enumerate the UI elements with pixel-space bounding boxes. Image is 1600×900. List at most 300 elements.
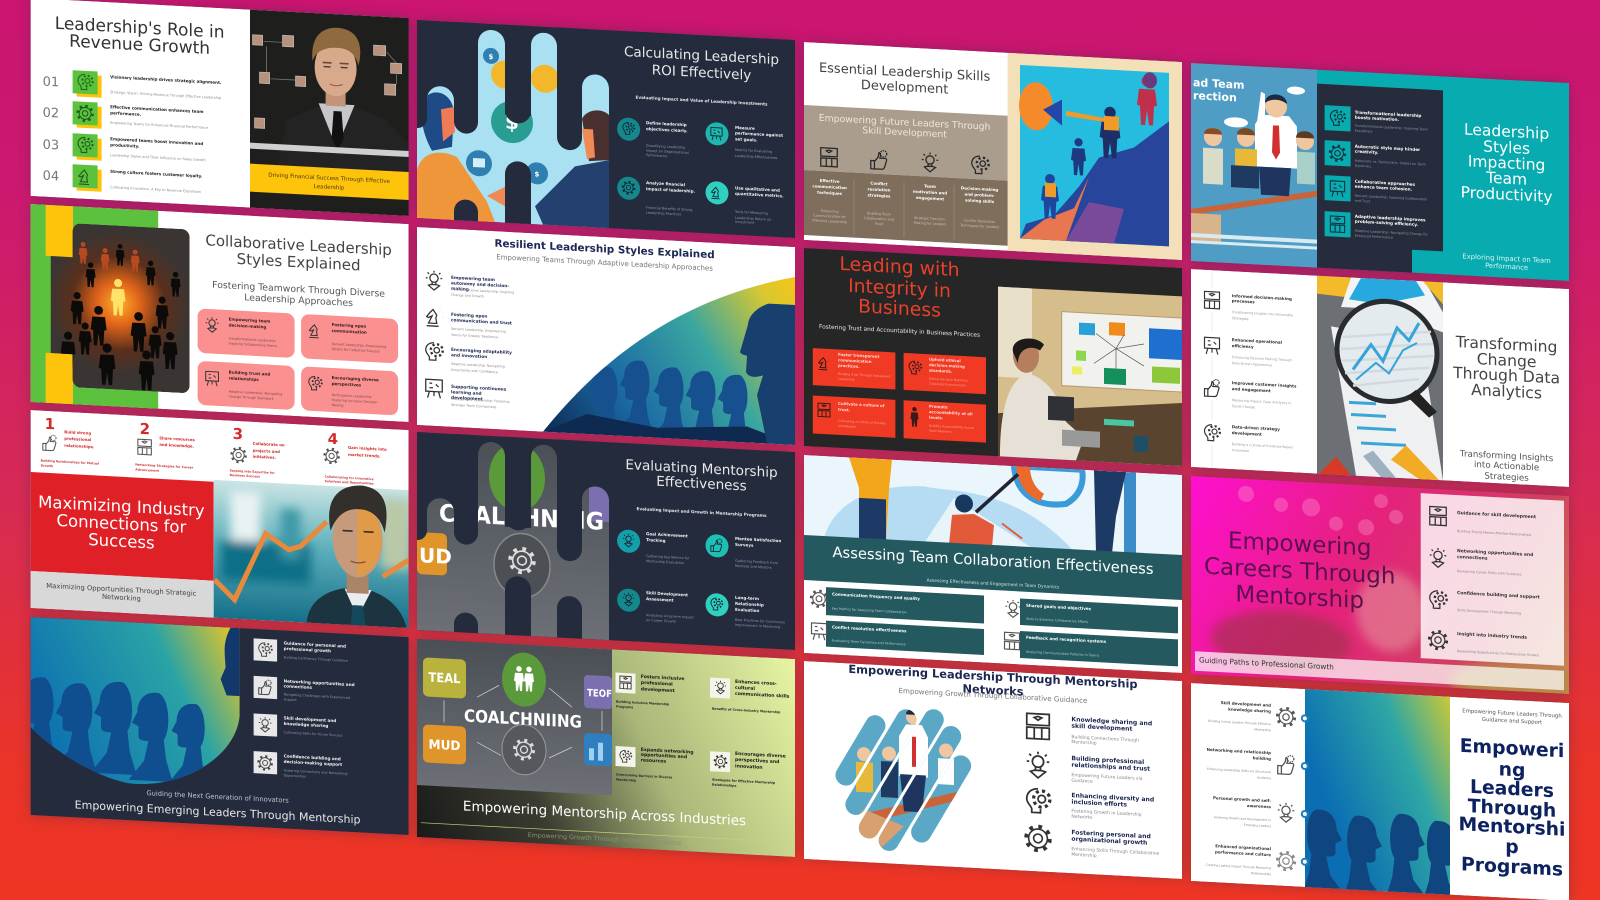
cards: perspectives (332, 381, 362, 388)
illustration: team on a beam (1191, 63, 1317, 268)
panel: Assessing Team Collaboration Effectiveness (804, 455, 1182, 673)
dark list panel: boosts motivation. (1355, 115, 1399, 122)
title: Empowering Leadership Through Mentorship (848, 662, 1138, 691)
title: ng (1499, 759, 1525, 782)
illustration: gradient blob with silhouettes (16, 616, 240, 789)
illustration: team climbing mountain (1019, 65, 1169, 246)
dark list panel: Transformational Leadership: Inspiring Team (1354, 124, 1428, 132)
dark list panel: Collaborative approaches (1355, 179, 1416, 187)
styles list: autonomy and decision- (451, 280, 509, 289)
title: Careers Through (1204, 554, 1395, 590)
skills band: motivation and (913, 189, 947, 196)
benefits list: efficiency (1232, 343, 1254, 349)
benefits list (616, 673, 790, 791)
list with icons: Confidence building and (284, 753, 341, 761)
metrics list: Evaluation (735, 607, 759, 613)
caption band (1195, 651, 1564, 690)
photo: coaching chalkboard through capsule windows: UD (419, 543, 452, 569)
styles list: Uncertainty with Confidence (451, 368, 498, 374)
dark list panel: Autocratic style may hinder (1355, 144, 1421, 152)
numbered tips: Tapping into Expertise for (230, 469, 275, 475)
benefits list: resources (641, 757, 666, 765)
title: Development (861, 78, 948, 98)
title: Through (1468, 796, 1556, 822)
numbered tips: Business Success (230, 473, 260, 479)
title: Empowering (1228, 528, 1371, 562)
illustration: team on a beam: rection (1193, 89, 1237, 104)
metrics list: set goals. (735, 136, 758, 143)
red cards: Cultivating a Culture of Honesty (838, 419, 886, 425)
skills band: Building Team (867, 211, 892, 217)
title: Calculating Leadership (624, 44, 779, 68)
benefits list: Innovation (1232, 448, 1249, 453)
numbered tips: Build strong (64, 429, 91, 436)
photo: magnifier over charts (1317, 276, 1443, 480)
timeline list: Mentorship (1254, 727, 1271, 732)
title: Leaders (1470, 777, 1554, 802)
metrics list: Leadership Effectiveness (735, 154, 777, 160)
skills band: Collaboration and (864, 216, 894, 222)
styles list: Empowering team (451, 275, 495, 283)
title: Analytics (1471, 381, 1542, 403)
red cards: communication (838, 357, 872, 364)
illustration: gradient with silhouettes (1303, 689, 1463, 900)
numbered list: Empowered teams boost innovation and (110, 136, 203, 146)
photo: man at desk with whiteboard (998, 287, 1182, 466)
styles list: communication and trust (451, 317, 512, 327)
numbered tips: Advancement (135, 468, 160, 473)
list with icons: Navigating Challenges with Experienced (284, 692, 350, 700)
list with icons: knowledge sharing (284, 721, 328, 728)
metric cards: Key Metrics for Assessing Team Collaboration (832, 606, 907, 614)
numbered list: performance. (110, 110, 142, 117)
subtitle: into Actionable (1474, 460, 1539, 473)
subtitle: Empowering Future Leaders Through (1462, 708, 1562, 720)
skills band: solving skills (965, 198, 995, 204)
metric cards: Feedback and recognition systems (1026, 635, 1107, 644)
styles list (426, 270, 514, 410)
title: Impacting (1468, 152, 1545, 174)
benefits list (1202, 270, 1297, 473)
benefits list: Building Inclusive Mentorship (616, 700, 670, 706)
metrics list: Mentee Satisfaction (735, 536, 781, 543)
skills band: Trust (874, 222, 884, 226)
numbered tips: Growth (41, 464, 53, 468)
guidance list: Building professional (1071, 755, 1144, 766)
subtitle: Exploring Impact on Team (1462, 252, 1551, 265)
red cards: Building Trust Through Transparent (838, 372, 891, 379)
metrics list: Investment (735, 220, 755, 225)
metrics list: Goal Achievement (646, 531, 688, 538)
illustration: team in diagonal capsules (814, 692, 994, 871)
skills band: Conflict Resolution (964, 218, 995, 224)
title: Empowering Emerging Leaders Through Mentorship (75, 798, 361, 826)
skills band: Effective Leadership (812, 218, 847, 224)
benefits list: Relationships (712, 783, 736, 788)
mentoring list panel: Networking opportunities and (1457, 548, 1533, 558)
title: Mentorshi (1459, 814, 1565, 841)
dark list panel: Adaptive Leadership: Navigating Change for (1355, 229, 1428, 237)
numbered tips: and knowledge. (159, 442, 195, 449)
panel: Essential Leadership Skills Development (804, 42, 1183, 260)
styles list: Collaborative Leadership: Fostering (451, 397, 509, 404)
title: Empoweri (1460, 736, 1564, 762)
panel: Collaborative Leadership Styles Explained (31, 204, 409, 422)
skills band: engagement (916, 195, 944, 201)
title: p (1505, 837, 1519, 858)
metric cards: Communication frequency and quality (832, 591, 920, 601)
title: Resilient Leadership Styles Explained (495, 238, 715, 261)
cards: Servant Leadership: Empowering (332, 342, 386, 349)
title: Leading with (840, 254, 959, 281)
list with icons: Fostering Connections and Networking (284, 768, 347, 776)
guidance list: Knowledge sharing and (1071, 716, 1152, 727)
metrics list: Tracking (646, 537, 666, 543)
timeline list: awareness (1247, 803, 1272, 809)
title: Effectiveness (656, 474, 747, 494)
numbered list: Leadership Styles and Their Influence on Sales Growth (110, 153, 206, 162)
guidance list: Networks (1071, 814, 1093, 821)
red title block: Success (88, 530, 155, 553)
photo: coaching chalkboard through capsule windows (407, 411, 609, 680)
benefits list: Overcoming Barriers in Diverse (616, 773, 672, 780)
benefits list: Enhancing Decision Making Through (1232, 355, 1292, 362)
benefits list: cultural (735, 685, 755, 692)
numbered tips: professional (64, 436, 91, 442)
cards: Making (332, 403, 343, 408)
bokeh lights (1238, 485, 1403, 537)
numbered list: Empowering Teams for Enhanced Financial Performance (110, 121, 208, 130)
subtitle: Evaluating Impact and Value of Leadership Investments (636, 95, 768, 107)
metrics list: Metrics for Evaluating (735, 148, 772, 154)
title: Productivity (1461, 183, 1553, 206)
timeline list: Skill development and (1221, 700, 1271, 708)
metrics list: Mentorship Evaluation (646, 559, 684, 565)
title: Leadership (1464, 120, 1549, 143)
panel: Empowering Careers Through Mentorship (1191, 476, 1591, 707)
skills band: Techniques for Leaders (959, 223, 999, 229)
styles list: Adaptive Leadership: Navigating (451, 362, 505, 369)
styles list: Fostering open (451, 312, 487, 320)
guidance list (1026, 713, 1159, 862)
timeline list: Creating Lasting Impact Through Mentoring (1206, 863, 1271, 870)
cards: relationships (229, 375, 259, 382)
panel: Evaluating Mentorship Effectiveness (407, 411, 795, 690)
panel: Empowering Mentorship Across Industries (417, 639, 795, 857)
photo: businessman and flowchart: Leadership (314, 184, 345, 192)
benefits list: development (641, 686, 675, 694)
dark list panel: problem-solving efficiency. (1355, 219, 1419, 227)
photo: businessman and flowchart (250, 10, 409, 216)
numbered tips: Gain insights into (348, 445, 387, 452)
dark list panel: and Trust (1355, 199, 1371, 204)
photo: coaching chalkboard: TEOF (587, 688, 612, 700)
benefits list: professional (641, 680, 673, 688)
photo: coaching chalkboard (417, 639, 612, 795)
metrics list: Tools for Measuring (734, 210, 768, 216)
styles list: development (451, 395, 483, 402)
list with icons: Networking opportunities and (284, 678, 355, 687)
benefits list: Fosters inclusive (641, 674, 684, 682)
subtitle: Guiding the Next Generation of Innovators (146, 789, 289, 805)
title: ROI Effectively (652, 62, 751, 84)
numbered list: 04 (43, 169, 59, 185)
title band: Assessing Team Collaboration Effectiveness (833, 544, 1153, 578)
skills band: and problem- (965, 192, 995, 198)
title: Business (858, 296, 941, 322)
title band: Assessing Effectiveness and Engagement in Team Dynamics (927, 578, 1060, 591)
skills band: techniques (817, 190, 843, 196)
benefits list: Enhances cross- (735, 679, 777, 687)
title: Styles Explained (237, 250, 361, 274)
panel: Transforming Change Through Data Analytics (1191, 269, 1569, 487)
skills band: Communication for (813, 213, 846, 219)
panel: Empowering Emerging Leaders Through Mentorship (16, 616, 409, 835)
panel: Calculating Leadership ROI Effectively (417, 20, 795, 238)
metrics list: objectives clearly. (646, 126, 688, 133)
cards (198, 308, 398, 415)
panel: Leading with Integrity in Business (804, 248, 1182, 466)
panel: Empowering Leadership Through Mentorship Networks (804, 660, 1182, 881)
list with icons (254, 638, 355, 781)
styles list: Teams for Greater Resilience (450, 333, 498, 339)
metrics list: performance against (735, 130, 783, 138)
metrics list: Analyzing Long-term Impact (646, 613, 695, 620)
red cards: Promote (929, 404, 948, 410)
subtitle: Evaluating Impact and Growth in Mentorship Programs (636, 506, 767, 518)
red cards: practices. (838, 363, 860, 369)
list with icons: decision-making support (284, 759, 342, 767)
subtitle: Fostering Teamwork Through Diverse (212, 280, 385, 300)
skills band: communication (812, 183, 847, 190)
illustration: handshake with capsule windows: $ (489, 53, 494, 61)
benefits list: Informed decision-making (1232, 293, 1292, 301)
title band (804, 535, 1182, 600)
timeline list: Guidance (1257, 775, 1271, 780)
subtitle: Empowering Teams Through Adaptive Leadership Approaches (496, 253, 713, 273)
illustration: team on a beam: ad Team (1193, 76, 1244, 92)
metrics list: Gathering Feedback from (735, 559, 779, 565)
benefits list: innovation (735, 763, 763, 771)
skills band: resolution (868, 186, 891, 193)
title: Empowering Mentorship Across Industries (463, 798, 746, 829)
subtitle: Fostering Trust and Accountability in Business Practices (819, 324, 980, 339)
guidance list: Empowering Future Leaders via (1071, 772, 1143, 782)
timeline list: Enhancing Leadership Skills via Structured (1207, 767, 1271, 774)
red title block: Maximizing Industry (38, 492, 205, 520)
skills band: Empowering Future Leaders Through (819, 113, 991, 133)
cards: Adaptive Leadership: Navigating (229, 389, 282, 396)
gray caption (31, 571, 214, 618)
red cards: and Respect (838, 424, 857, 429)
numbered list: 02 (43, 106, 59, 122)
title: Team (1485, 169, 1527, 189)
cards: communication (332, 328, 367, 335)
skills band: Effective (820, 178, 840, 184)
green and yellow accent (31, 204, 158, 409)
numbered tips: Collaborating for Innovative (325, 475, 374, 481)
list with icons: Opportunities (284, 773, 306, 779)
red cards: standards. (929, 368, 953, 374)
dark list panel: Dynamics (1355, 164, 1371, 169)
benefits list: processes (1232, 298, 1255, 304)
metrics list: Financial Benefits of Strong (646, 206, 692, 212)
photo: coaching chalkboard: COALCHNIING (464, 707, 582, 733)
cards: Change Through Teamwork (229, 394, 274, 401)
metrics list: Quantifying Leadership (646, 144, 685, 150)
metrics list: Surveys (735, 542, 754, 548)
mentoring list panel: Confidence building and support (1457, 590, 1541, 601)
metrics list: Relationship (735, 601, 764, 607)
dark list panel: Autocratic vs. Democratic: Impact on Team (1355, 159, 1426, 166)
illustration: curved gradient with silhouettes (543, 264, 795, 450)
mentoring list panel (1421, 493, 1564, 666)
title: Leadership's Role in (55, 14, 224, 43)
title: Integrity in (848, 276, 951, 302)
gray caption: Maximizing Opportunities Through Strategic (46, 582, 197, 598)
numbered list: 03 (43, 138, 59, 154)
numbered list: Strong culture fosters customer loyalty. (110, 169, 203, 179)
benefits list: opportunities and (641, 752, 687, 760)
red cards: Foster transparent (838, 352, 879, 359)
subtitle: Guidance and Support (1482, 717, 1542, 726)
list with icons: Building Confidence Through Guidance (284, 655, 348, 663)
numbered tips (41, 415, 387, 486)
cards: Transformational Leadership: (228, 336, 277, 343)
guidance list: inclusion efforts (1071, 799, 1127, 809)
numbered tips: Collaborate on (253, 441, 285, 447)
gray caption: Networking (102, 593, 141, 603)
metrics list: impact of leadership. (646, 186, 696, 194)
timeline list: performance and culture (1215, 849, 1271, 857)
metrics list: Improvement in Mentoring (735, 623, 780, 629)
benefits list: and engagement (1232, 386, 1271, 393)
metrics list: Impact on Organizational (646, 149, 689, 155)
benefits list: Building a Culture of Evidence-Based (1232, 442, 1293, 449)
metrics list (617, 117, 784, 226)
timeline list: Emerging Leaders (1244, 823, 1271, 828)
timeline list: Relationships (1251, 871, 1271, 876)
metrics list: Analyze financial (646, 180, 686, 187)
panel: Resilient Leadership Styles Explained (417, 227, 795, 450)
photo: businessman and flowchart: Driving Financial Success Through Effective (268, 173, 391, 185)
red cards: Building Accountability Across (929, 424, 975, 430)
benefits list: Encourages diverse (735, 751, 786, 760)
mentoring list panel: Skills Development Through Mentoring (1457, 608, 1521, 615)
mentoring list panel: Navigating Career Paths with Guidance (1457, 569, 1522, 577)
timeline list: Enhanced organizational (1215, 843, 1272, 851)
blurred photo tones (1211, 562, 1591, 707)
title: Through Data (1452, 364, 1560, 388)
illustration: handshake with capsule windows: $ (535, 170, 540, 178)
guidance list: Fostering Growth in Leadership (1071, 808, 1142, 818)
benefits list: Measuring Impact: Data Analytics in (1232, 398, 1291, 405)
dark list panel: Adaptive leadership improves (1355, 214, 1426, 222)
list with icons: Skill development and (284, 715, 336, 723)
cards: Encouraging diverse (332, 375, 379, 382)
red cards: Uphold ethical (929, 357, 961, 363)
photo: young man with chart overlay (214, 478, 411, 628)
styles list: making (451, 286, 469, 293)
numbered tips: relationships. (64, 443, 95, 449)
red cards: decision-making (929, 362, 965, 369)
skills band: Strategic Decision- (914, 216, 947, 222)
benefits list: Strategies (1232, 316, 1249, 321)
photo: coaching chalkboard through capsule windows: AL (431, 464, 459, 489)
metrics list: Gathering Key Metrics for (646, 554, 690, 560)
timeline list: Personal growth and self- (1213, 795, 1271, 803)
mentoring list panel: Networking Opportunities for Professional Growth (1457, 649, 1539, 657)
timeline list: Networking and relationship (1207, 747, 1271, 755)
numbered list: Cultivating Innovation: A Key to Revenue Expansion (110, 185, 201, 194)
numbered tips: Networking Strategies for Career (135, 463, 194, 470)
cards: Building trust and (229, 369, 270, 377)
cards: Empowering team (229, 316, 270, 324)
numbered tips: initiatives. (253, 454, 277, 460)
benefits list: Benefits of Cross-Industry Mentorship (712, 707, 781, 714)
timeline list: building (1253, 755, 1271, 761)
metrics list: Performance (646, 153, 667, 158)
red cards: Team Members (928, 429, 952, 434)
dark list panel: Enhanced Performance (1355, 234, 1393, 240)
timeline list: Building Future Leaders Through Effective (1208, 719, 1271, 726)
metrics list: on Career Growth (646, 618, 676, 624)
numbered tips: 2 (140, 420, 150, 438)
subtitle: Performance (1485, 262, 1528, 272)
subtitle: Empowering Growth Through Collaborative Guidance (899, 686, 1087, 705)
numbered tips: projects and (253, 448, 280, 454)
photo: coaching chalkboard: MUD (428, 738, 461, 754)
red cards: Ethical Decision Making in (929, 377, 968, 383)
list with icons: connections (284, 683, 313, 690)
illustration: handshake with capsule windows: $ (505, 110, 519, 134)
title: Programs (1461, 854, 1563, 881)
benefits list: development (1232, 430, 1262, 437)
guidance list: Mentorship (1071, 739, 1097, 747)
guidance list: organizational growth (1071, 836, 1147, 847)
timeline list: knowledge sharing (1228, 706, 1271, 714)
red cards (813, 348, 986, 443)
numbered tips: 1 (45, 415, 55, 433)
benefits list: Mentorship (616, 778, 637, 783)
guidance list: Enhancing diversity and (1071, 792, 1154, 804)
panel: Maximizing Industry Connections for Success (31, 410, 411, 628)
list with icons: Guidance for personal and (284, 640, 346, 649)
dark list panel: creativity. (1355, 149, 1379, 155)
guidance list: Fostering personal and (1071, 829, 1151, 840)
numbered list: Visionary leadership drives strategic alignment. (110, 74, 222, 85)
numbered list: 01 (43, 75, 59, 91)
guidance list: Guidance (1071, 778, 1093, 785)
metric cards: Tools to Enhance Collaborative Efforts (1025, 617, 1089, 624)
subtitle: Leadership Approaches (244, 292, 353, 309)
metrics list: Measure (735, 125, 755, 131)
benefits list: Improved customer insights (1232, 380, 1297, 389)
subtitle: Strategies (1484, 472, 1529, 484)
title: Essential Leadership Skills (819, 61, 990, 85)
panel: Leadership Styles Impacting Team Productivity (1191, 63, 1569, 281)
illustration: handshake with capsule windows (417, 20, 609, 228)
dark list panel: Transformational leadership (1355, 110, 1421, 118)
metrics list: Leadership Practices (646, 211, 681, 217)
numbered tips: market trends. (348, 452, 381, 459)
timeline list: Fostering Growth and Development in (1214, 815, 1271, 822)
numbered list: Effective communication enhances team (110, 104, 203, 114)
red cards: trust. (838, 407, 851, 412)
cards: decision-making (229, 322, 266, 329)
benefits list: Data-driven strategy (1232, 424, 1280, 432)
styles list: Supporting continuous (451, 384, 507, 393)
